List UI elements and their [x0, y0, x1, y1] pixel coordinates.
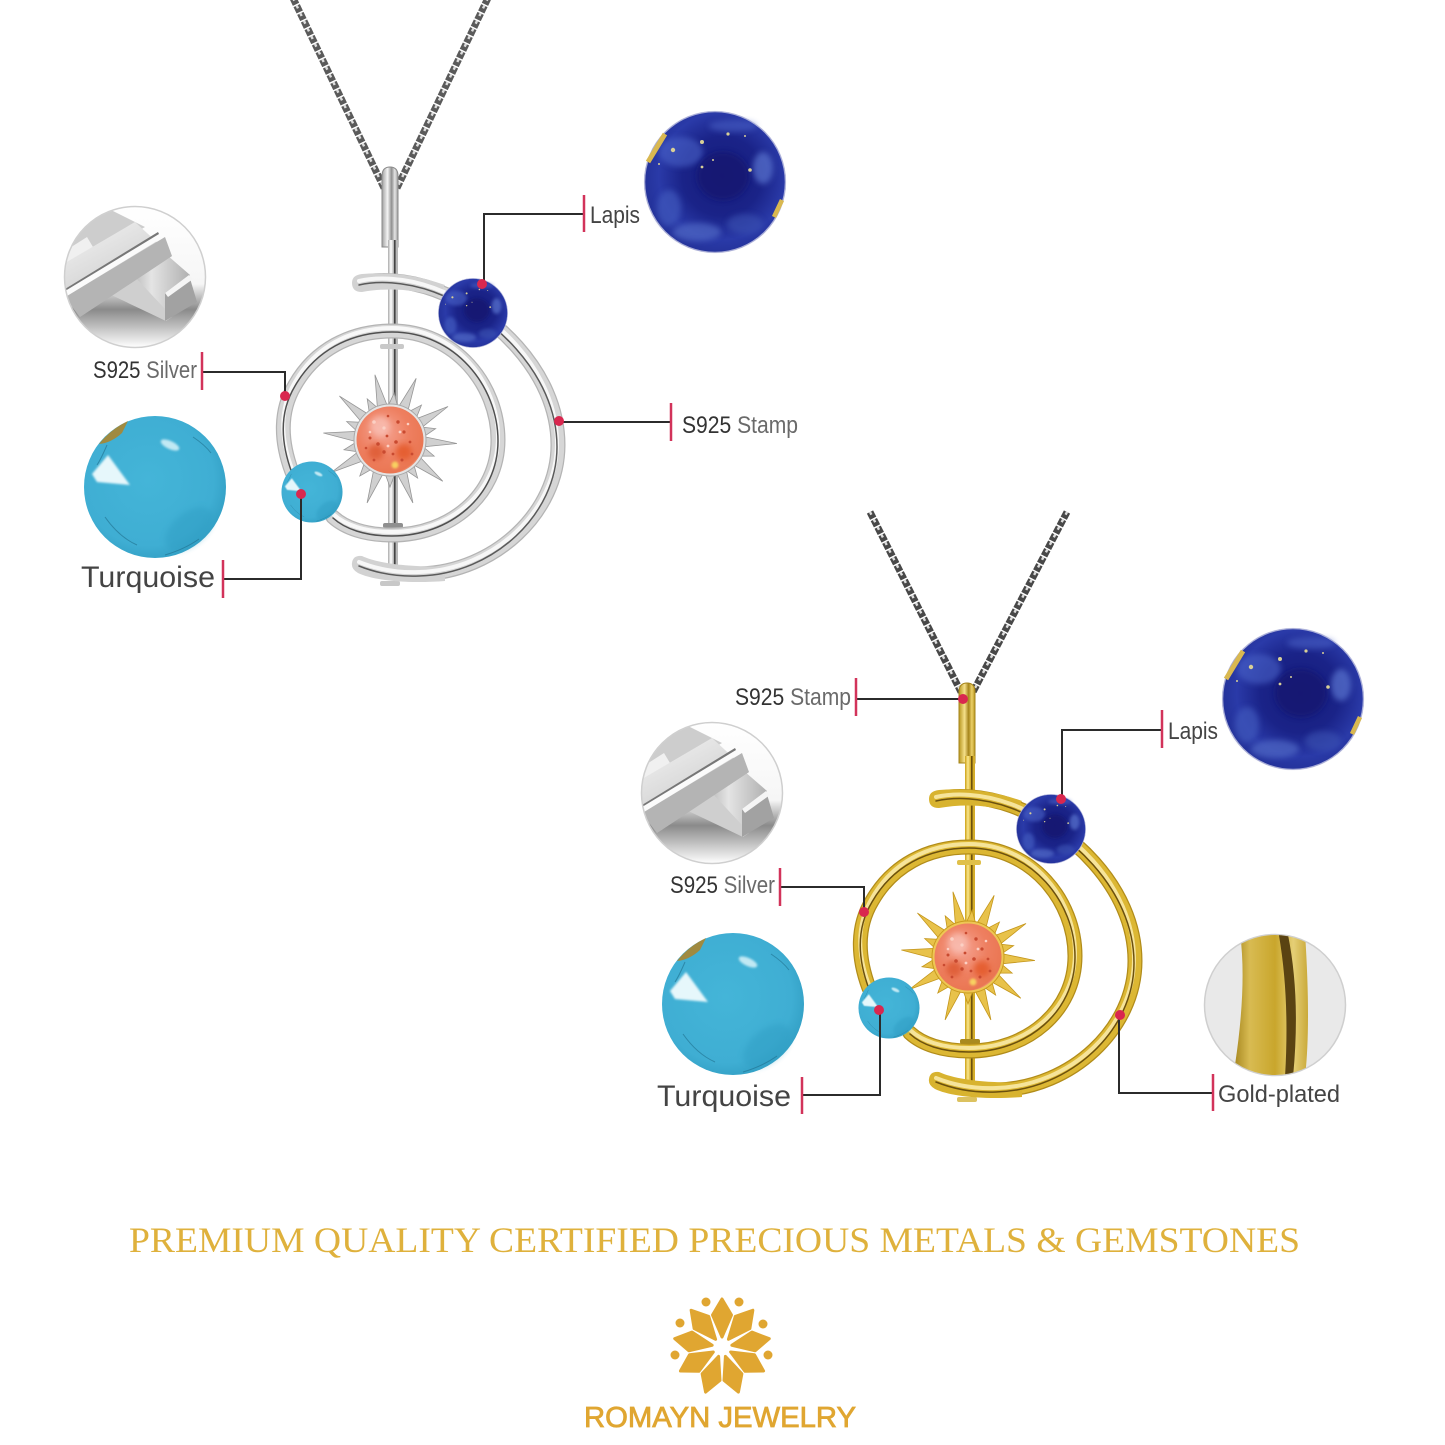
silver pendant: [281, 0, 558, 586]
gold chain: [870, 512, 1067, 692]
big lapis ball: [1222, 628, 1364, 770]
callout: S925 Silver: [93, 352, 290, 401]
gold crescent arc: [929, 789, 1135, 1098]
logo wordmark: ROMAYN JEWELRY: [584, 1402, 856, 1434]
callout: Turquoise: [81, 489, 306, 598]
gold-plated swatch: [1204, 930, 1346, 1077]
callout: S925 Stamp: S925 Stamp: [682, 412, 798, 439]
callout: S925 Stamp: [554, 403, 798, 441]
callout: S925 Silver: S925 Silver: [93, 357, 197, 384]
callout: Turquoise: [657, 1005, 884, 1114]
silver crescent arc: [352, 273, 558, 582]
gold pendant: [858, 512, 1135, 1102]
title: PREMIUM QUALITY CERTIFIED PRECIOUS METALS & GEMSTONES: [129, 1220, 1300, 1260]
small turquoise bead: [281, 461, 343, 523]
callout: Gold-plated: Gold-plated: [1218, 1081, 1340, 1108]
silver bail and stem: [380, 167, 404, 586]
callout: Lapis: [477, 195, 640, 289]
small turquoise bead: [858, 977, 920, 1039]
silver sun with stone: [323, 373, 457, 505]
callout: Gold-plated: [1115, 1010, 1340, 1111]
silver swatch: [640, 722, 782, 864]
gold bail and stem: [957, 683, 981, 1102]
callout: S925 Silver: [670, 868, 869, 917]
callout: Lapis: [1056, 710, 1218, 804]
gold inner ring: [860, 844, 1075, 1052]
callout: S925 Stamp: S925 Stamp: [735, 684, 851, 711]
callout: Lapis: Lapis: [590, 202, 640, 229]
big turquoise ball: [662, 933, 804, 1076]
silver inner ring: [283, 328, 498, 536]
silver chain: [293, 0, 488, 188]
big turquoise ball: [84, 416, 226, 559]
callout: S925 Stamp: [735, 678, 968, 716]
small lapis bead: [1016, 794, 1086, 864]
small lapis bead: [438, 278, 508, 348]
logo flower icon: [670, 1298, 772, 1395]
gold sun with stone: [901, 890, 1035, 1022]
silver swatch: [63, 206, 206, 348]
callout: Lapis: Lapis: [1168, 718, 1218, 745]
callout: Turquoise: Turquoise: [657, 1080, 791, 1113]
callout: Turquoise: Turquoise: [81, 561, 215, 594]
big lapis ball: [644, 111, 786, 253]
callout: S925 Silver: S925 Silver: [670, 872, 775, 899]
